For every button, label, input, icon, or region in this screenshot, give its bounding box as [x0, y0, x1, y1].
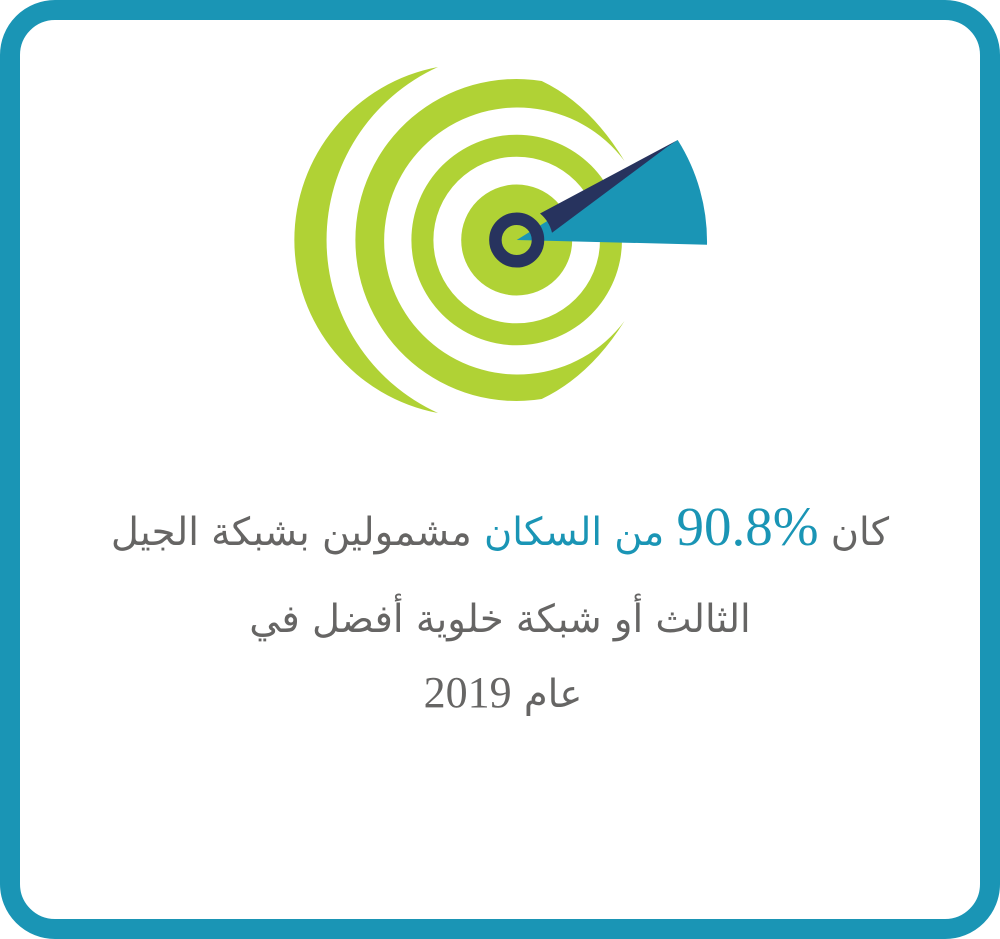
line 1: كان 90.8% من السكان مشمولين بشبكة الجيل: [111, 496, 889, 557]
line 3: عام 2019: [424, 668, 582, 717]
inner green disc: [461, 184, 572, 296]
outer crescent ring: [294, 67, 438, 413]
third ring: [355, 79, 624, 401]
second ring: [411, 135, 622, 345]
dark centre ring: [495, 219, 538, 261]
line 2: الثالث أو شبكة خلوية أفضل في: [249, 597, 751, 642]
dark needle: [540, 140, 678, 233]
blue sector: [517, 140, 707, 245]
text block: coverage statement: [111, 496, 890, 717]
